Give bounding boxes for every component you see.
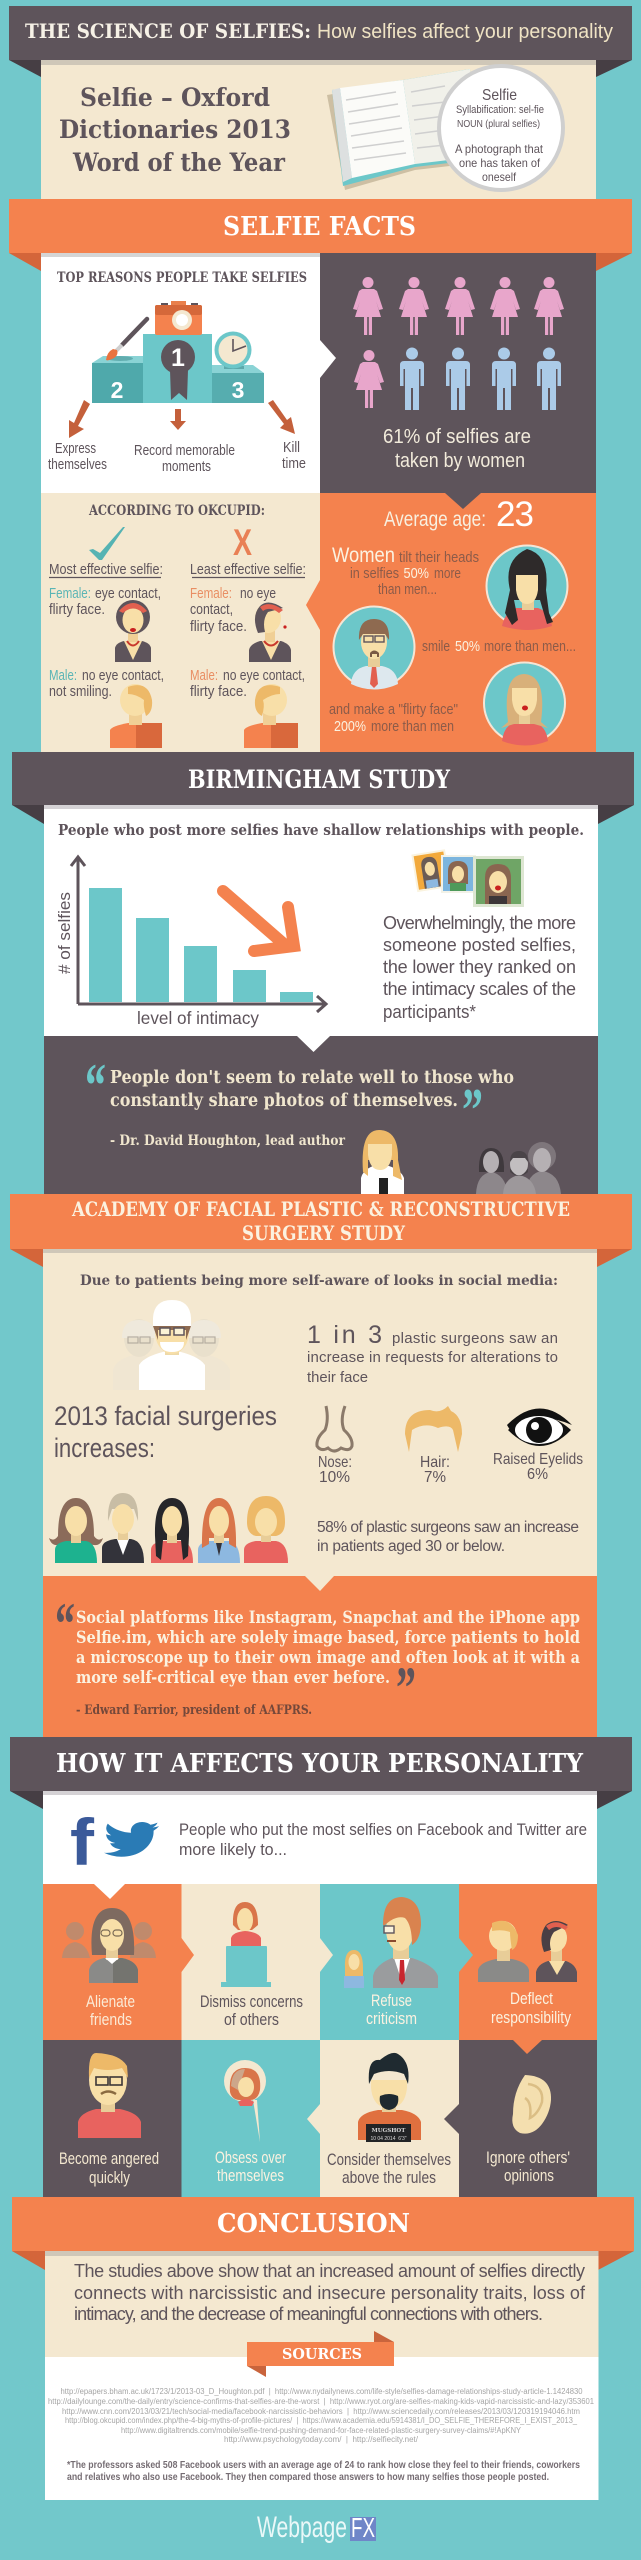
cell: consider themselves above the rules — [327, 2053, 451, 2187]
text: women tilt their heads: more — [434, 565, 461, 582]
text: women tilt their heads: 50% — [404, 565, 429, 582]
cell: ignore others opinions: Ignore others' — [486, 2149, 570, 2167]
heading: social media self-awareness: Due to patients being more self-aware of looks in social media: — [80, 1273, 558, 1289]
label: hair: 7% — [424, 1469, 446, 1486]
arrows: reasons — [69, 400, 295, 438]
icon: podium: 3 — [232, 377, 244, 403]
icon: eye — [507, 1408, 572, 1446]
cell: alienate friends: friends — [90, 2011, 132, 2029]
panel: average age — [306, 493, 596, 752]
icon: grey group of people — [476, 1142, 561, 1194]
panel: average age: Average age: — [384, 508, 486, 531]
text: women tilt their heads: Women — [332, 544, 395, 567]
label: raised eyelids: 6% — [527, 1466, 548, 1483]
arrow: downward trend — [223, 891, 294, 951]
text: flirty face 200 percent: more than men — [371, 718, 454, 735]
text: reasons labels: Express — [55, 440, 96, 457]
icon: blonde woman — [484, 662, 565, 746]
text: footnote — [67, 2459, 580, 2483]
okcupid columns text: no eye contact, — [82, 667, 164, 684]
text: more likely to: more likely to... — [179, 1841, 287, 1859]
okcupid check icon — [89, 527, 125, 560]
quote text: Selfie.im, which are solely image based, force patients to hold — [76, 1628, 580, 1647]
section banner: how it affects your personality — [10, 1737, 632, 1809]
heading: word of the year — [59, 83, 291, 177]
text: source urls: http://www.psychologytoday.com/ | http://selfiecity.net/ — [224, 2435, 419, 2444]
quote text: People don't seem to relate well to those who — [110, 1068, 514, 1088]
cell: alienate friends: Alienate — [86, 1993, 135, 2011]
quote text: more self-critical eye than ever before. — [76, 1668, 390, 1687]
text: overwhelmingly — [383, 913, 576, 1022]
label: raised eyelids: Raised Eyelids — [493, 1451, 583, 1468]
callout: selfie definition: Selfie — [482, 87, 517, 104]
section banner: academy of facial plastic surgery: SURGERY STUDY — [242, 1221, 406, 1245]
icon: woman profile — [249, 602, 291, 662]
section banner: selfie facts: SELFIE FACTS — [223, 212, 416, 242]
label: nose: 10% — [319, 1469, 350, 1486]
cell: consider themselves above the rules: above the rules — [342, 2169, 436, 2187]
icon: lab woman holding phone — [361, 1130, 404, 1194]
okcupid columns text: flirty face. — [190, 618, 247, 635]
callout: selfie definition: one has taken of — [459, 156, 541, 170]
text: reasons labels: moments — [162, 458, 211, 475]
cell: deflect responsibility: responsibility — [491, 2009, 572, 2027]
text: 58 percent of surgeons: 58% of plastic surgeons saw an increase — [317, 1519, 579, 1536]
title banner — [9, 6, 632, 77]
cell: alienate friends — [62, 1908, 156, 2029]
text: 1 in 3 — [307, 1321, 558, 1386]
panel: conclusion text: connects with narcissistic and insecure personality traits, loss of — [74, 2283, 586, 2303]
title main text: THE SCIENCE OF SELFIES: — [25, 19, 311, 43]
okcupid columns text: Least effective selfie: — [190, 561, 306, 578]
icon: podium — [92, 334, 264, 403]
section banner: birmingham study: BIRMINGHAM STUDY — [188, 765, 451, 794]
section banner: how it affects your personality: HOW IT AFFECTS YOUR PERSONALITY — [56, 1749, 583, 1779]
panel: academy findings — [43, 1249, 597, 1576]
heading: word of the year: Dictionaries 2013 — [59, 115, 291, 144]
cell: deflect responsibility: Deflect — [510, 1990, 553, 2008]
text: 1 in 3: their face — [307, 1369, 368, 1386]
cell: ignore others opinions — [486, 2075, 570, 2185]
section banner: conclusion — [12, 2197, 634, 2270]
text: 1 in 3: increase in requests for alterations to — [307, 1349, 558, 1366]
cell: become angered: quickly — [89, 2169, 131, 2187]
text: reasons labels: Record memorable — [134, 442, 235, 459]
cell: dismiss concerns: Dismiss concerns — [200, 1993, 303, 2011]
text: reasons labels: themselves — [48, 456, 107, 473]
quote attribution: - Dr. David Houghton, lead author — [110, 1133, 346, 1149]
cell: obsess over themselves: themselves — [217, 2167, 284, 2185]
quote text: constantly share photos of themselves. — [110, 1091, 458, 1111]
panel: conclusion text: intimacy, and the decrease of meaningful connections with others. — [74, 2304, 543, 2324]
quote open mark: “ — [55, 1591, 75, 1657]
heading: 2013 facial surgeries: 2013 facial surgeries — [54, 1401, 277, 1431]
icon: clock — [214, 332, 252, 369]
cell: become angered: Become angered — [59, 2150, 159, 2168]
icon: man profile right — [244, 684, 298, 748]
ribbon: sources — [247, 2331, 394, 2377]
bar chart — [55, 857, 326, 1028]
okcupid columns text: contact, — [190, 601, 233, 618]
text: overwhelmingly: the lower they ranked on — [383, 957, 576, 977]
text: 61 percent: taken by women — [395, 450, 525, 472]
text: flirty face 200 percent — [329, 701, 458, 735]
text: 1 in 3: 1 in 3 — [307, 1321, 382, 1349]
cell: become angered — [59, 2053, 159, 2187]
text: flirty face 200 percent: and make a "flirty face" — [329, 701, 458, 718]
text: reasons labels — [48, 439, 306, 475]
text: women tilt their heads: than men... — [378, 581, 437, 598]
text: smile 50 percent: smile — [422, 638, 450, 655]
okcupid columns text: Male: — [49, 667, 77, 684]
cell: refuse criticism: Refuse — [371, 1992, 412, 2010]
text: reasons labels: time — [282, 455, 306, 472]
icon: five young people — [49, 1493, 288, 1563]
bar chart: level of intimacy — [137, 1008, 259, 1028]
callout: selfie definition: A photograph that — [455, 142, 544, 156]
label: hair — [420, 1454, 450, 1486]
icon: twitter bird — [104, 1822, 159, 1857]
cell: consider themselves above the rules: Consider themselves — [327, 2151, 451, 2169]
icon: camera — [155, 301, 202, 335]
text: source urls: http://dailylounge.com/the-daily/entry/science-confirms-that-selfies-are-the-worst | http://www.ryot.org/are-selfies-making-kids-vapid-narcissistic-and-lazy/353601 — [48, 2397, 595, 2406]
cell: refuse criticism: criticism — [366, 2010, 417, 2028]
panel: 61 percent of selfies by women — [320, 253, 596, 493]
panel: conclusion text: The studies above show that an increased amount of selfies directly — [74, 2261, 585, 2281]
icon: podium: 1 — [171, 344, 185, 372]
okcupid columns text: no eye — [240, 585, 276, 602]
icon: man profile left — [110, 684, 162, 748]
callout: selfie definition: NOUN (plural selfies) — [457, 119, 540, 130]
section banner: birmingham study — [12, 752, 634, 824]
icon: man with moustache — [334, 606, 414, 690]
quote text: a microscope up to their own image and often look at it with a — [76, 1648, 580, 1667]
okcupid columns text: Female: — [190, 585, 232, 602]
okcupid columns text — [49, 561, 306, 700]
logo: webpagefx: FX — [351, 2512, 375, 2543]
text: source urls: http://www.cnn.com/2013/03/21/tech/social-media/facebook-narcissistic-behaviors | http://www.sciencedaily.com/releases/2013/03/120319194046.htm — [62, 2407, 580, 2416]
bar chart: # of selfies — [55, 892, 74, 974]
text: 1 in 3: plastic surgeons saw an — [392, 1330, 558, 1347]
text: source urls: http://www.digitaltrends.com/mobile/selfie-trend-pushing-demand-for-face-related-plastic-surgery-survey-claims/#!ApKNY — [121, 2426, 522, 2435]
text: source urls — [48, 2387, 595, 2444]
okcupid columns text: flirty face. — [190, 683, 247, 700]
ribbon: sources: SOURCES — [282, 2345, 362, 2363]
quote close mark: ” — [462, 1077, 483, 1145]
text: women tilt their heads — [332, 544, 479, 598]
okcupid x icon: X — [233, 522, 252, 563]
text: source urls: http://epapers.bham.ac.uk/1723/1/2013-03_D_Houghton.pdf | http://www.nydailynews.com/life-style/selfies-damage-relationships-study-article-1.1424830 — [60, 2387, 583, 2396]
icon: paintbrush — [106, 319, 147, 360]
cell: consider themselves above the rules: 10 04 2014 6'3" — [370, 2136, 407, 2142]
title subtitle: How selfies affect your personality — [317, 21, 613, 43]
icon: woman front — [115, 600, 151, 662]
callout: selfie definition: oneself — [482, 170, 517, 184]
icon: nose — [317, 1406, 352, 1451]
heading: shallow relationships: People who post more selfies have shallow relationships with people. — [58, 822, 584, 839]
label: nose: Nose: — [318, 1454, 352, 1471]
text: footnote: and relatives who also use Facebook. They then compared those answers to how many selfies those people posted. — [67, 2471, 549, 2483]
text: smile 50 percent — [422, 638, 576, 655]
text: source urls: http://blog.okcupid.com/index.php/the-4-big-myths-of-profile-pictures/ | https://www.academia.edu/5914381/I_DO_SELFIE_THEREFORE_I_EXIST_2013_ — [65, 2416, 578, 2425]
text: overwhelmingly: the intimacy scales of the — [383, 979, 576, 999]
heading: 2013 facial surgeries: increases: — [54, 1433, 155, 1463]
icon: selfie photos — [411, 849, 524, 907]
text: women tilt their heads: tilt their heads — [399, 549, 479, 566]
pictogram: gender split — [353, 277, 564, 410]
label: hair: Hair: — [420, 1454, 450, 1471]
panel: traits grid — [43, 1884, 597, 2197]
panel: word of the year — [41, 60, 596, 199]
quote text — [76, 1608, 580, 1687]
cell: ignore others opinions: opinions — [504, 2167, 554, 2185]
icon: podium: 2 — [111, 377, 123, 403]
panel: conclusion text — [45, 2251, 598, 2357]
okcupid columns text: not smiling. — [49, 683, 112, 700]
panel: farrior quote — [43, 1576, 597, 1737]
heading: okcupid: ACCORDING TO OKCUPID: — [88, 503, 265, 519]
section banner: conclusion: CONCLUSION — [217, 2209, 410, 2239]
callout: selfie definition — [439, 66, 563, 190]
text: flirty face 200 percent: 200% — [334, 718, 366, 735]
text: 58 percent of surgeons: in patients aged 30 or below. — [317, 1538, 505, 1555]
panel: social media intro — [43, 1791, 597, 1884]
heading: top reasons: TOP REASONS PEOPLE TAKE SELFIES — [57, 270, 307, 286]
logo: webpagefx: Webpage — [257, 2511, 347, 2544]
panel: houghton quote — [44, 1036, 598, 1194]
okcupid columns text: Female: — [49, 585, 91, 602]
quote attribution: - Edward Farrior, president of AAFPRS. — [76, 1703, 312, 1718]
label: nose — [318, 1454, 352, 1486]
text: overwhelmingly: participants* — [383, 1002, 476, 1022]
text: smile 50 percent: 50% — [455, 638, 480, 655]
icon: open book — [327, 69, 476, 190]
text: overwhelmingly: Overwhelmingly, the more — [383, 913, 576, 933]
cell: consider themselves above the rules: MUGSHOT — [372, 2128, 406, 2134]
okcupid columns text: Most effective selfie: — [49, 561, 163, 578]
okcupid columns text: flirty face. — [49, 601, 105, 618]
callout: selfie definition: Syllabification: sel-fie — [456, 104, 544, 116]
text: overwhelmingly: someone posted selfies, — [383, 935, 576, 955]
okcupid columns text: eye contact, — [95, 585, 161, 602]
text: more likely to — [179, 1821, 587, 1859]
cell: dismiss concerns — [200, 1902, 303, 2029]
okcupid columns text: Male: — [190, 667, 218, 684]
icon: woman with braids — [486, 546, 568, 630]
panel: sources and notes — [45, 2331, 598, 2500]
cell: deflect responsibility — [478, 1921, 577, 2027]
icon: hair — [405, 1406, 462, 1452]
panel: birmingham findings — [44, 805, 598, 1036]
quote text — [110, 1068, 514, 1111]
panel: average age: 23 — [496, 495, 534, 534]
panel: according to okcupid — [41, 493, 320, 752]
text: women tilt their heads: in selfies — [350, 565, 399, 582]
cell: obsess over themselves — [215, 2060, 286, 2185]
heading: word of the year: Selfie – Oxford — [80, 83, 270, 112]
label: raised eyelids — [493, 1451, 583, 1483]
quote close mark: ” — [396, 1655, 416, 1721]
icon: facebook: f — [70, 1805, 95, 1879]
text: more likely to: People who put the most selfies on Facebook and Twitter are — [179, 1821, 587, 1839]
heading: word of the year: Word of the Year — [72, 148, 286, 177]
text: 58 percent of surgeons — [317, 1519, 579, 1555]
cell: obsess over themselves: Obsess over — [215, 2149, 286, 2167]
cell: dismiss concerns: of others — [224, 2011, 279, 2029]
quote open mark: “ — [85, 1052, 106, 1120]
section banner: academy of facial plastic surgery — [10, 1194, 632, 1267]
okcupid columns text: no eye contact, — [223, 667, 305, 684]
text: 61 percent — [383, 426, 531, 472]
panel: top reasons people take selfies — [41, 253, 320, 493]
quote text: Social platforms like Instagram, Snapchat and the iPhone app — [76, 1608, 580, 1627]
icon: surgeons — [113, 1300, 230, 1390]
text: 61 percent: 61% of selfies are — [383, 426, 531, 448]
cell: refuse criticism — [344, 1897, 438, 2028]
text: smile 50 percent: more than men... — [484, 638, 576, 655]
section banner: selfie facts — [9, 199, 632, 271]
heading: 2013 facial surgeries — [54, 1401, 277, 1463]
text: reasons labels: Kill — [283, 439, 300, 456]
